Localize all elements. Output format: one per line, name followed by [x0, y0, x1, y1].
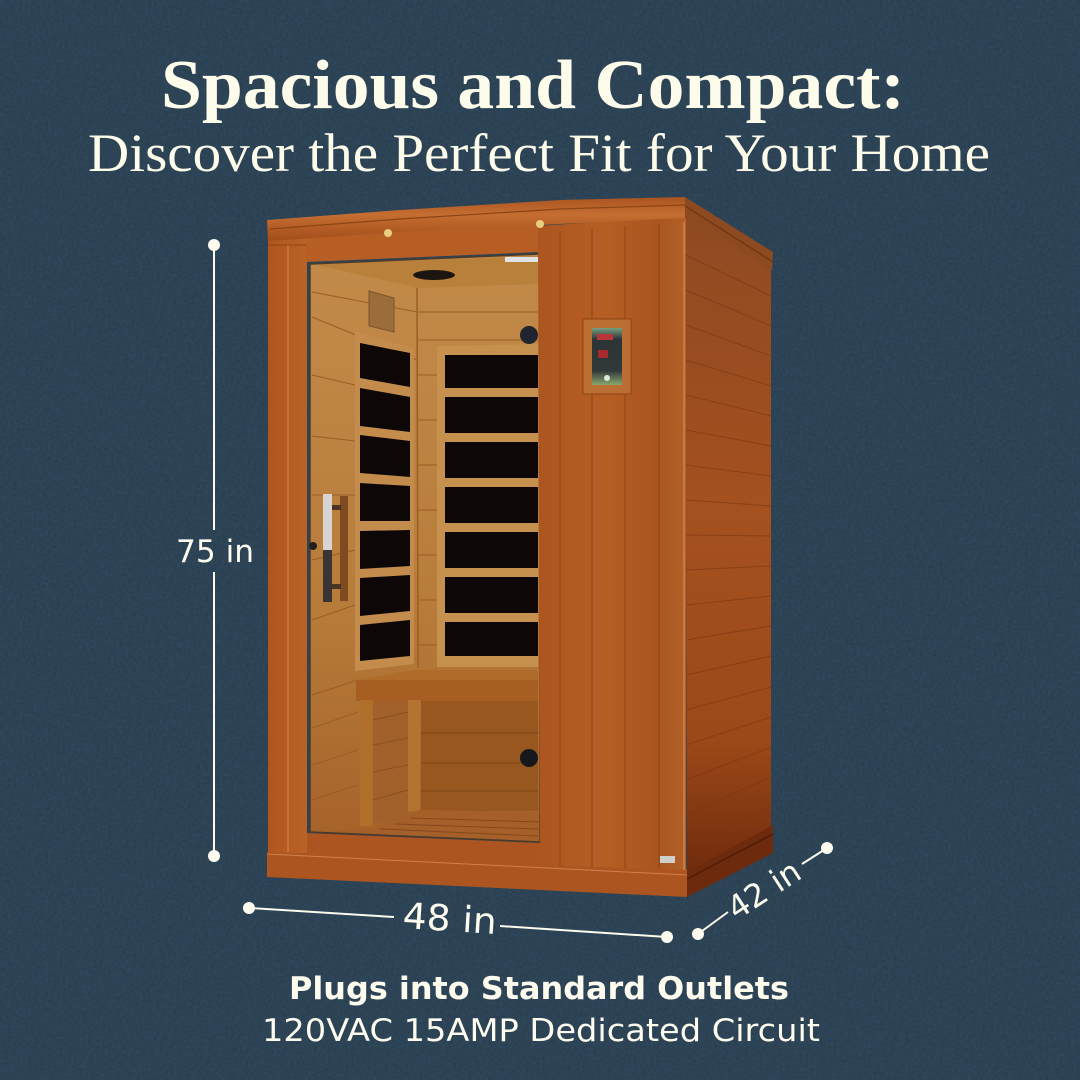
- wall planks: [312, 292, 538, 800]
- left door jamb: [268, 236, 307, 853]
- dimension: width 48 in: 48 in: [402, 896, 498, 943]
- footer text: [262, 971, 820, 1049]
- floor: [312, 810, 538, 842]
- footer text: Plugs into Standard Outlets: [289, 971, 789, 1007]
- back wall heater panels: [437, 344, 538, 667]
- sauna illustration: [267, 197, 773, 897]
- corner line: [417, 288, 418, 668]
- crown top trim: [267, 197, 773, 270]
- title: Spacious and Compact:: [161, 47, 905, 124]
- sauna front panel: [538, 216, 686, 870]
- door handle: [309, 494, 348, 602]
- ceiling: [312, 256, 540, 288]
- sauna base: [267, 825, 773, 897]
- dimension: depth 42 in: [692, 842, 833, 940]
- dimension: height 75 in: [176, 239, 254, 862]
- dimension: height 75 in: 75 in: [176, 534, 254, 570]
- title: Discover the Perfect Fit for Your Home: [88, 123, 990, 183]
- glass door frame: [310, 254, 540, 842]
- footer text: 120VAC 15AMP Dedicated Circuit: [262, 1013, 820, 1049]
- title: [88, 47, 990, 183]
- left wall heater panels: [355, 332, 414, 671]
- bench: [356, 670, 538, 826]
- sauna side wall: [685, 218, 771, 872]
- dimension: width 48 in: [243, 896, 673, 943]
- door hinges: [520, 326, 538, 344]
- control panel: [583, 319, 631, 394]
- header beam: [306, 220, 540, 262]
- warning label: [369, 291, 394, 332]
- sauna interior through glass door: [310, 254, 540, 842]
- dimension: depth 42 in: 42 in: [720, 852, 808, 927]
- product tag: [660, 856, 675, 863]
